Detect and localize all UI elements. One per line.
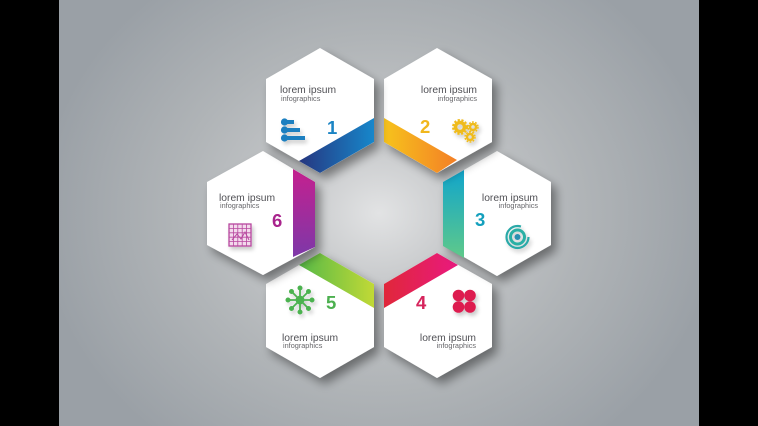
- hexagon 4: [384, 253, 492, 378]
- subheading 4: infographics: [437, 341, 476, 350]
- number 2: 2: [420, 116, 430, 137]
- heading 4: lorem ipsum: [420, 333, 476, 344]
- icon: flower: [453, 290, 476, 313]
- hexagon 2: [384, 48, 492, 173]
- subheading 2: infographics: [438, 94, 477, 103]
- hexagon 6: [207, 151, 315, 275]
- band 4: [384, 253, 458, 308]
- hexagon 3: [443, 151, 551, 276]
- band 1: [299, 118, 374, 173]
- number 5: 5: [326, 292, 336, 313]
- band 6: [293, 169, 315, 257]
- number 4: 4: [416, 292, 427, 313]
- heading 2: lorem ipsum: [421, 85, 477, 96]
- hexagon 5: [266, 253, 374, 378]
- band 3: [443, 170, 464, 258]
- icon: gears: [453, 120, 478, 142]
- number 1: 1: [327, 117, 337, 138]
- subheading 6: infographics: [220, 201, 260, 210]
- heading 5: lorem ipsum: [282, 333, 338, 344]
- hexagon 1: [266, 48, 374, 173]
- icon: target: [506, 226, 528, 248]
- icon: grid chart: [229, 224, 251, 246]
- heading 1: lorem ipsum: [280, 85, 336, 96]
- subheading 1: infographics: [281, 94, 321, 103]
- band 5: [299, 253, 374, 308]
- icon: snowflake: [286, 286, 314, 314]
- subheading 3: infographics: [499, 201, 538, 210]
- icon: list: [281, 118, 305, 142]
- number 6: 6: [272, 210, 282, 231]
- heading 6: lorem ipsum: [219, 193, 275, 204]
- subheading 5: infographics: [283, 341, 323, 350]
- band 2: [384, 118, 457, 173]
- heading 3: lorem ipsum: [482, 193, 538, 204]
- number 3: 3: [475, 209, 485, 230]
